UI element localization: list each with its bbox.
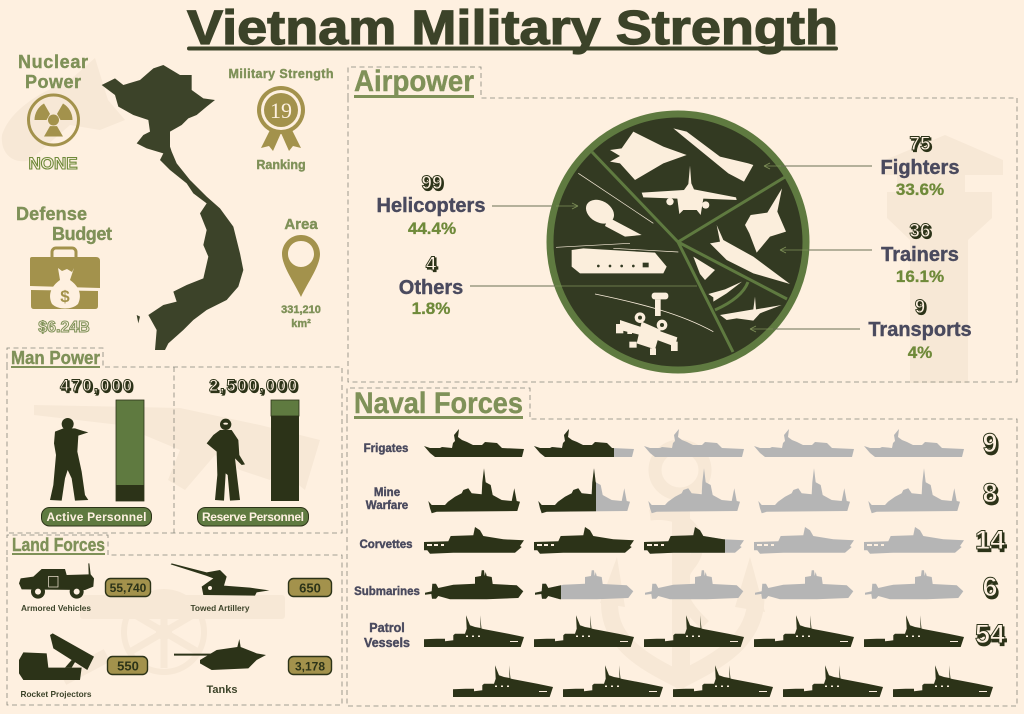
map of Vietnam xyxy=(102,65,243,350)
reserve personnel: 2,500,000 xyxy=(209,377,297,395)
icon: location pin xyxy=(282,235,320,297)
tanks: Tanks xyxy=(207,684,237,696)
tanks xyxy=(174,639,332,696)
panel: defense budget: Budget xyxy=(52,224,112,244)
row: patrol vessels: 54 xyxy=(976,622,1007,652)
label: trainers: 16.1% xyxy=(896,267,944,286)
armored vehicles xyxy=(19,563,150,613)
towed artillery: Towed Artillery xyxy=(190,603,250,613)
heading: airpower: Airpower xyxy=(354,65,474,98)
label: trainers: Trainers xyxy=(881,244,959,266)
panel: area: km² xyxy=(291,318,311,330)
title: Vietnam Military Strength xyxy=(187,2,838,55)
label: others: 1.8% xyxy=(412,299,450,318)
label: active personnel xyxy=(42,508,152,526)
panel: nuclear power: NONE xyxy=(28,154,78,173)
row: mine warfare: Mine xyxy=(374,487,400,499)
active personnel: 470,000 xyxy=(62,378,134,396)
row: frigates: 9 xyxy=(982,428,998,458)
label: fighters: 75 xyxy=(911,136,932,156)
row: corvettes: Corvettes xyxy=(359,539,413,551)
icon: radiation xyxy=(28,95,78,145)
panel: defense budget xyxy=(16,204,112,336)
icon: briefcase with money bag: $ xyxy=(60,287,70,306)
label: helicopters: 99 xyxy=(421,173,443,194)
label: transports: 9 xyxy=(915,297,925,318)
towed artillery xyxy=(171,563,332,613)
count pill xyxy=(288,656,332,674)
leader lines xyxy=(470,166,872,329)
row: corvettes: 14 xyxy=(976,528,1007,558)
label: transports: 9 xyxy=(916,298,927,320)
row: frigates xyxy=(364,429,999,457)
row: submarines: Submarines xyxy=(354,586,420,598)
row: mine warfare: 8 xyxy=(982,478,998,508)
row: patrol vessels: Vessels xyxy=(364,636,410,650)
count pill xyxy=(288,578,332,596)
label: fighters: Fighters xyxy=(881,157,959,179)
armored vehicles: Armored Vehicles xyxy=(21,603,91,613)
row: frigates: 9 xyxy=(984,430,999,460)
reserve personnel: 2,500,000 xyxy=(210,378,298,396)
count pill: 550 xyxy=(117,658,139,674)
icon: towed artillery xyxy=(171,563,269,596)
label: active personnel: Active Personnel xyxy=(46,510,146,524)
label: trainers: 36 xyxy=(909,221,931,242)
label: helicopters: 44.4% xyxy=(408,219,456,238)
label: fighters: 75 xyxy=(909,134,931,155)
panel: airpower xyxy=(348,65,1017,382)
label: reserve personnel xyxy=(198,508,308,526)
row: mine warfare: 8 xyxy=(984,480,999,510)
row: mine warfare: Warfare xyxy=(366,500,408,512)
bar: reserve share xyxy=(271,400,299,501)
panel: military strength ranking: Ranking xyxy=(256,158,306,172)
row: submarines xyxy=(354,570,999,600)
active personnel xyxy=(42,377,152,526)
panel: area: Area xyxy=(284,216,318,233)
panel: defense budget: $6.24B xyxy=(38,319,90,336)
panel: area xyxy=(281,216,321,330)
chart: aircraft pie xyxy=(550,114,808,370)
row: frigates: Frigates xyxy=(364,443,408,455)
label: helicopters: 99 xyxy=(423,174,444,196)
icon: soldier xyxy=(207,419,245,501)
reserve personnel xyxy=(198,377,308,526)
icon: ranking badge: 19 xyxy=(270,98,292,123)
icon: armored vehicle xyxy=(19,563,94,599)
panel: nuclear power xyxy=(18,52,88,173)
panel: land forces xyxy=(7,535,342,705)
label: trainers: 36 xyxy=(911,222,932,244)
count pill: 3,178 xyxy=(295,660,325,674)
heading: man power: Man Power xyxy=(11,348,100,368)
count pill: 650 xyxy=(299,580,321,596)
row: corvettes xyxy=(360,527,1007,554)
row: submarines: 6 xyxy=(984,574,999,604)
label: others: Others xyxy=(399,277,463,299)
panel: nuclear power: Power xyxy=(25,72,81,92)
row: mine warfare xyxy=(366,468,999,513)
label: helicopters: Helicopters xyxy=(377,195,485,217)
icon: soldier xyxy=(50,418,88,501)
panel: nuclear power: Nuclear xyxy=(18,52,88,72)
label: fighters: 33.6% xyxy=(896,180,944,199)
panel: military strength ranking: Military Strength xyxy=(228,67,334,81)
label: others: 4 xyxy=(426,254,437,275)
row: patrol vessels: 54 xyxy=(975,619,1005,649)
label: fighters xyxy=(881,134,959,199)
label: others: 4 xyxy=(427,256,438,276)
heading: naval forces: Naval Forces xyxy=(354,387,523,420)
rocket projectors: Rocket Projectors xyxy=(20,689,92,699)
panel: military strength ranking xyxy=(228,67,334,172)
aircraft silhouettes xyxy=(556,128,790,355)
label: transports: Transports xyxy=(868,319,972,341)
label: helicopters xyxy=(377,173,485,238)
panel: naval forces xyxy=(347,387,1017,706)
label: reserve personnel: Reserve Personnel xyxy=(202,510,304,524)
label: others xyxy=(399,254,463,318)
heading: land forces: Land Forces xyxy=(12,535,105,555)
row: corvettes: 14 xyxy=(975,525,1005,555)
icon: rocket projector xyxy=(19,633,94,680)
icon: tank xyxy=(174,639,266,670)
panel: area: 331,210 xyxy=(281,304,321,316)
row: patrol vessels: Patrol xyxy=(369,621,405,635)
label: transports: 4% xyxy=(908,343,932,362)
row: submarines: 6 xyxy=(982,572,998,602)
panel: defense budget: Defense xyxy=(16,204,87,224)
active personnel: 470,000 xyxy=(60,377,132,395)
row: patrol vessels xyxy=(364,615,1007,697)
label: transports xyxy=(868,297,972,362)
count pill: 55,740 xyxy=(110,581,147,595)
panel: man power xyxy=(7,348,342,533)
label: trainers xyxy=(881,221,959,286)
bar: active share xyxy=(116,400,144,501)
rocket projectors xyxy=(19,633,147,699)
